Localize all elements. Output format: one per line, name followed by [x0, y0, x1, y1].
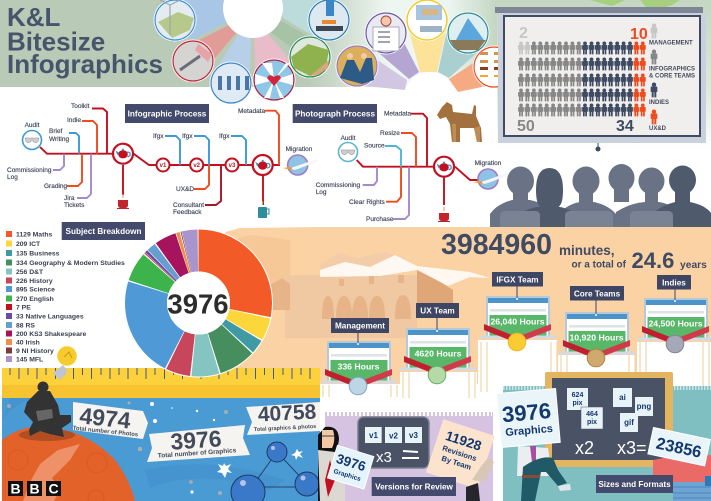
process labels: Migration	[286, 146, 313, 153]
dim stars	[7, 402, 228, 495]
headline: minutes total: years	[680, 260, 707, 271]
process labels: Toolkit	[71, 103, 90, 110]
screen legend: UX&D	[649, 126, 667, 132]
screen legend: INDIES	[649, 100, 669, 106]
process labels: Grading	[44, 183, 68, 190]
card: graphics	[328, 445, 374, 489]
process labels: Log	[7, 174, 18, 181]
panel: versions for review	[318, 412, 495, 501]
chalkboard: versions	[358, 417, 429, 468]
headline: minutes total: or a total of	[572, 260, 627, 271]
laptop: core teams	[559, 286, 635, 367]
laptop: indies	[638, 275, 711, 353]
process labels: Clear Rights	[349, 199, 386, 206]
screen numbers	[517, 25, 648, 135]
icon: heart and union flag	[252, 58, 296, 102]
process labels	[316, 110, 502, 223]
banner: photos total	[72, 402, 148, 439]
label: management: Management	[335, 322, 385, 330]
process labels: UX&D	[176, 186, 194, 193]
banner: graphics and photos total: Total graphics & photos	[254, 424, 316, 433]
icon: glasses audit	[22, 130, 42, 150]
chalkboard: formats	[545, 372, 673, 467]
icon: migration plane	[283, 155, 318, 175]
process labels: Tickets	[64, 202, 85, 209]
legend: subjects: 270 English	[16, 296, 54, 303]
icon: light bulb	[53, 346, 78, 380]
banner: graphics total: Total number of Graphics	[158, 447, 237, 460]
icon: cup	[438, 207, 450, 222]
process labels: Ifgx	[182, 133, 193, 140]
planet	[2, 427, 135, 501]
donut total: 3976	[167, 288, 229, 320]
seated figure	[517, 446, 571, 501]
fan of subject wedges one	[175, 0, 350, 75]
label: ux team: UX Team	[420, 306, 455, 316]
chalkboard: versions: v2	[389, 432, 398, 440]
label: core teams: Core Teams	[574, 290, 621, 298]
legend: subjects: 1129 Maths	[16, 231, 52, 238]
process labels: Audit	[25, 122, 40, 129]
card: graphics	[497, 388, 560, 447]
icon: teapot	[434, 157, 454, 177]
legend: subjects	[6, 231, 125, 364]
chalkboard: formats: 464	[586, 411, 598, 418]
heading: subject breakdown	[62, 222, 145, 240]
version labels: v1	[160, 163, 167, 169]
version labels: v2	[193, 163, 201, 169]
icon: glasses audit	[338, 142, 358, 162]
laptop: core teams: 10,920 Hours	[569, 332, 624, 342]
legend: subjects: 7 PE	[16, 305, 31, 312]
process labels: Jira	[64, 195, 75, 202]
title	[7, 2, 163, 79]
process labels: Metadata	[384, 110, 411, 118]
donut chart	[124, 228, 273, 378]
heading: sizes and formats: Sizes and Formats	[598, 480, 671, 489]
pedestals	[320, 340, 711, 412]
stars	[150, 402, 303, 494]
title: Bitesize	[7, 26, 105, 56]
process labels: Feedback	[173, 209, 202, 216]
title: Infographics	[7, 49, 163, 79]
card: revisions	[426, 419, 495, 489]
card: revisions: By Team	[440, 454, 473, 472]
audience silhouettes	[490, 164, 711, 227]
legend: subjects: 40 Irish	[16, 339, 40, 346]
laptop: ifgx team: 26,040 Hours	[490, 316, 545, 326]
screen legend: MANAGEMENT	[649, 40, 693, 46]
chalkboard: formats: x3=	[617, 438, 647, 458]
screen numbers: 34	[616, 118, 634, 135]
icon: wind turbine landscape	[154, 0, 196, 42]
process heading: photograph	[293, 104, 377, 123]
chalkboard: formats: pix	[587, 419, 597, 426]
logo: BBC: B	[10, 480, 21, 496]
molecules	[231, 442, 319, 501]
icon: cup	[117, 194, 129, 208]
label: ifgx team: IFGX Team	[496, 276, 539, 284]
screen legend	[649, 24, 695, 132]
banner: graphics and photos total: 40758	[257, 400, 317, 427]
banner: graphics total	[147, 425, 250, 462]
legend: subjects: 135 Business	[16, 251, 60, 258]
version labels	[160, 163, 236, 169]
astronaut reader silhouette	[19, 382, 75, 441]
card: graphics: Graphics	[333, 468, 362, 483]
process labels: Brief	[49, 128, 63, 135]
chalkboard: formats: ai	[619, 393, 626, 402]
process labels: Ifgx	[219, 133, 230, 140]
chalkboard: formats: 624	[572, 392, 583, 399]
process heading: infographic: Infographic Process	[128, 110, 207, 118]
grey people	[518, 42, 582, 116]
management people	[518, 42, 530, 54]
icon: moon landing	[172, 40, 214, 82]
laptop: management	[321, 318, 397, 395]
process labels: Purchase	[366, 216, 394, 223]
logo: BBC	[8, 480, 61, 496]
icon: green valley	[288, 36, 332, 78]
indies people	[582, 42, 633, 116]
headline: minutes total	[441, 229, 707, 273]
process labels: Source	[364, 142, 385, 150]
process labels: Resize	[380, 130, 400, 137]
process labels: Consultant	[173, 202, 204, 209]
chalkboard: formats: png	[637, 402, 651, 411]
card: graphics: 3976	[334, 451, 368, 474]
version nodes	[156, 158, 238, 172]
card: graphics: Graphics	[505, 423, 553, 439]
banner: graphics total: 3976	[170, 425, 222, 455]
panel: sizes and formats	[497, 372, 711, 501]
icon: school children	[336, 44, 378, 88]
label: indies: Indies	[662, 278, 686, 288]
laptop: ux team	[400, 303, 476, 384]
headline: minutes total: minutes,	[559, 243, 615, 258]
icon: animal rows	[472, 46, 516, 88]
process labels: Migration	[475, 160, 502, 167]
legend: subjects: 145 MFL	[16, 357, 43, 364]
chalkboard: versions: v3	[409, 431, 418, 440]
process heading: infographic	[125, 104, 209, 123]
headline: minutes total: 24.6	[632, 248, 674, 273]
legend: subjects: 88 RS	[16, 322, 35, 329]
process labels: Audit	[341, 135, 356, 142]
chalkboard: formats: x2	[575, 438, 594, 458]
icon: migration plane	[473, 169, 508, 189]
icon: mug	[258, 201, 269, 218]
legend: subjects: 9 NI History	[16, 348, 54, 355]
laptop: ifgx team	[480, 272, 556, 351]
process labels: Metadata	[238, 108, 265, 115]
process heading: photograph: Photograph Process	[295, 110, 375, 118]
header background	[0, 0, 711, 150]
ux and design people	[634, 42, 646, 116]
headline: minutes total: 3984960	[441, 229, 552, 261]
icon: presenter with clipboard	[364, 12, 408, 54]
castle illustration	[232, 235, 490, 338]
process labels: Commissioning	[7, 167, 52, 174]
banner: photos total: Total number of Photos	[72, 426, 139, 439]
panel: projector screen	[495, 7, 706, 152]
card: revisions: 11928	[444, 428, 484, 454]
icon: teapot	[113, 144, 133, 164]
logo: BBC: C	[48, 480, 59, 496]
process labels: Writing	[49, 136, 69, 143]
legend: subjects: 226 History	[16, 278, 53, 285]
screen numbers: 10	[630, 26, 648, 43]
heading: versions for review: Versions for Review	[375, 482, 454, 492]
chalkboard: formats: gif	[624, 418, 634, 427]
heading: versions for review	[372, 477, 456, 496]
banner: photos total: 4974	[78, 402, 132, 434]
icon: terrier dog	[437, 102, 482, 142]
screen numbers: 2	[519, 25, 528, 42]
process labels: Indie	[67, 117, 81, 124]
fan of subject wedges two	[365, 25, 482, 128]
woman presenter	[318, 427, 345, 501]
version labels: v3	[229, 163, 236, 169]
icon: 3D printer	[308, 0, 350, 42]
card: graphics: 3976	[501, 398, 552, 427]
screen legend: & CORE TEAMS	[649, 74, 695, 80]
icon: computer	[406, 0, 448, 42]
chalkboard: versions: x3	[376, 449, 392, 466]
process labels: Commissioning	[316, 182, 361, 189]
laptop: management: 336 Hours	[337, 362, 380, 372]
heading: sizes and formats	[596, 475, 673, 493]
laptop: ux team: 4620 Hours	[415, 348, 462, 358]
icon: teapot	[253, 155, 273, 175]
card: revisions: Revisions	[441, 444, 478, 463]
seated person with red shirt	[653, 445, 711, 501]
banner: graphics and photos total	[246, 400, 320, 435]
process labels: Ifgx	[153, 133, 164, 140]
process flow: photograph	[316, 110, 508, 223]
carrier figure	[466, 458, 494, 501]
legend: subjects: 334 Geography & Modern Studies	[16, 260, 125, 267]
process labels	[7, 103, 313, 216]
chalkboard: versions: v1	[369, 431, 378, 440]
card: total sizes: 23856	[654, 435, 703, 462]
process labels: Log	[316, 189, 327, 196]
legend: subjects: 895 Science	[16, 287, 55, 294]
screen numbers: 50	[517, 118, 535, 135]
legend: subjects: 33 Native Languages	[16, 313, 84, 320]
process flow: infographic	[7, 103, 318, 218]
icon: water cross section	[446, 12, 490, 54]
legend: subjects: 200 KS3 Shakespeare	[16, 331, 87, 338]
icon: population figures	[210, 62, 252, 104]
heading: subject breakdown: Subject Breakdown	[66, 227, 141, 236]
laptop: indies: 24,500 Hours	[648, 318, 703, 328]
legend: subjects: 209 ICT	[16, 241, 41, 248]
screen legend: INFOGRAPHICS	[649, 67, 695, 73]
peach background	[225, 227, 711, 384]
card: total sizes	[648, 427, 710, 466]
legend: subjects: 256 D&T	[16, 269, 44, 276]
chalkboard: formats: pix	[572, 400, 583, 407]
panel: totals with ruler and space	[2, 368, 320, 501]
title: K&L	[7, 2, 61, 32]
logo: BBC: B	[29, 480, 40, 496]
